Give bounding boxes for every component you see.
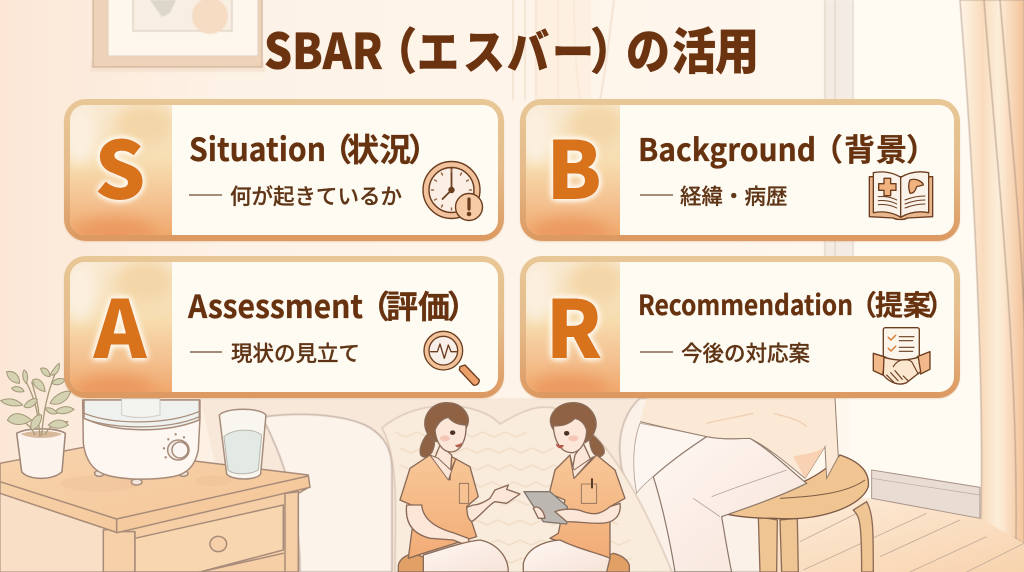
title: ス	[463, 14, 505, 83]
floor and baseboard	[723, 470, 1024, 572]
title: 活	[672, 13, 716, 84]
window frame and sheer curtains	[513, 0, 853, 398]
framed picture on wall	[90, 0, 265, 72]
title: エ	[417, 14, 459, 83]
heading: Assessment: ）	[447, 282, 479, 328]
heading: Situation: 況	[379, 125, 411, 171]
icon: magnifier with pulse	[424, 331, 479, 385]
title: ー	[552, 14, 594, 83]
heading: Situation: 状	[347, 125, 379, 171]
panel: S Situation	[62, 99, 504, 246]
panel: A Assessment	[62, 256, 504, 403]
title: の	[626, 13, 670, 84]
heading: Background: 景	[876, 125, 907, 170]
heading: Situation: ）	[408, 125, 440, 171]
icon: open medical book	[869, 172, 933, 219]
nurses seated in conversation	[398, 403, 629, 572]
panel: R Recommendation	[518, 256, 960, 403]
subtext: 今後の対応案	[681, 337, 810, 368]
icon: checklist and handshake	[873, 328, 930, 384]
title: ）	[590, 13, 634, 84]
nurse left	[398, 403, 520, 572]
title: 用	[715, 13, 759, 84]
icon: clock with alert	[423, 162, 482, 220]
seated person: lap, pants and stool	[634, 398, 873, 572]
nurse right	[523, 403, 629, 572]
letter A: A	[93, 266, 148, 382]
heading: Recommendation: ）	[927, 284, 955, 324]
letter B: B	[546, 107, 602, 223]
heading: Background: （	[812, 125, 843, 170]
heading: Recommendation: 案	[903, 284, 931, 324]
title: バ	[507, 14, 549, 83]
humidifier	[83, 398, 200, 485]
subtext: 何が起きているか	[230, 180, 402, 211]
heading: Assessment: Assessment	[187, 282, 363, 328]
subtext: 現状の見立て	[231, 337, 360, 368]
heading: Situation: （	[320, 125, 352, 171]
potted plant	[1, 363, 74, 478]
sofa	[200, 398, 770, 572]
letter R: R	[546, 266, 602, 382]
subtext: 経緯・病歴	[680, 180, 788, 211]
glass of water	[219, 409, 266, 479]
heading: Recommendation: （	[849, 284, 877, 324]
panel: B Background	[518, 99, 960, 246]
heading: Assessment: 評	[386, 282, 418, 328]
heading: Recommendation: Recommendation	[638, 284, 853, 324]
heading: Recommendation: 提	[875, 284, 903, 324]
heading: Background: ）	[906, 125, 937, 170]
side table with drawer	[0, 447, 310, 572]
heading: Situation: Situation	[189, 125, 326, 171]
letter S: S	[94, 107, 146, 223]
heading: Background: 背	[844, 125, 875, 170]
knitted blanket	[382, 406, 672, 572]
heading: Assessment: 価	[418, 282, 450, 328]
heading: Assessment: （	[358, 282, 390, 328]
right curtain	[960, 0, 1024, 545]
heading: Background: Background	[638, 125, 816, 170]
title: （	[373, 13, 417, 84]
title: SBAR	[264, 13, 383, 84]
